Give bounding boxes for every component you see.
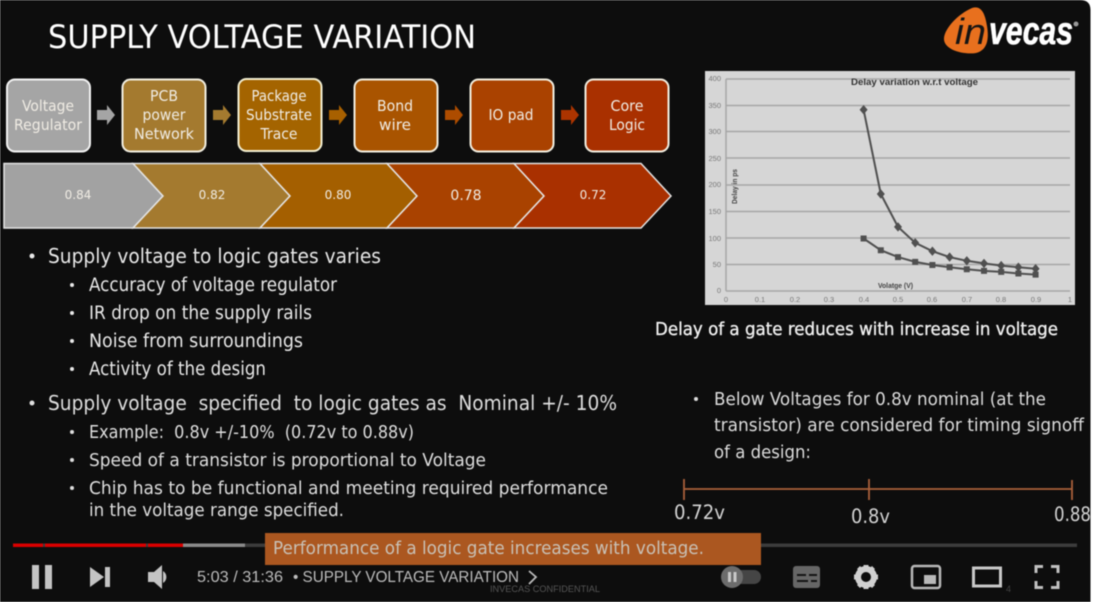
main bullet list: nominal range: Speed of a transistor is proportional to Voltage bbox=[89, 451, 486, 471]
right bullet text: Below Voltages for 0.8v nominal (at the bbox=[714, 390, 1046, 410]
y axis labels bbox=[708, 74, 721, 295]
box: PCB power network: PCB bbox=[150, 87, 178, 105]
icon: volume bbox=[148, 565, 166, 589]
slide number: 4 bbox=[1006, 584, 1011, 594]
x axis labels: 0.6 bbox=[927, 295, 937, 304]
series: upper delay curve bbox=[860, 105, 1040, 273]
box: package substrate trace: Package bbox=[252, 87, 306, 105]
box: PCB power network: Network bbox=[134, 125, 194, 143]
y axis labels: 400 bbox=[708, 74, 721, 83]
y axis labels: 250 bbox=[708, 154, 721, 163]
icon: chapter chevron bbox=[529, 571, 536, 584]
icon: next bbox=[90, 567, 110, 587]
player controls bbox=[32, 565, 1058, 589]
chevron 0.84 bbox=[4, 164, 163, 228]
x axis labels: 0.8 bbox=[996, 295, 1006, 304]
main bullet list: nominal range: Example: 0.8v +/-10% (0.72v to 0.88v) bbox=[89, 423, 414, 443]
process flow boxes bbox=[7, 79, 668, 152]
chevron 0.80: 0.80 bbox=[325, 188, 351, 202]
icon: settings gear bbox=[854, 565, 878, 589]
chevron 0.72: 0.72 bbox=[580, 188, 606, 202]
video progress bar bbox=[13, 544, 1077, 547]
x axis labels: 1 bbox=[1068, 295, 1072, 304]
box: voltage regulator bbox=[7, 80, 90, 152]
x axis labels: 0.1 bbox=[755, 295, 765, 304]
box: core logic: Core bbox=[610, 97, 644, 115]
box: IO pad bbox=[470, 80, 554, 152]
x axis labels: 0 bbox=[724, 295, 728, 304]
box: bond wire: wire bbox=[379, 116, 411, 134]
voltage range ruler bbox=[674, 479, 1091, 528]
x axis labels: 0.7 bbox=[962, 295, 972, 304]
main bullet list: nominal range bbox=[30, 391, 617, 521]
icon: invecas logo: vecas bbox=[989, 10, 1073, 53]
box: package substrate trace: Substrate bbox=[246, 106, 312, 124]
icon: autoplay toggle bbox=[721, 566, 761, 588]
y axis labels: 50 bbox=[713, 260, 721, 269]
x axis labels: 0.2 bbox=[790, 295, 800, 304]
voltage range ruler: 0.88 bbox=[1054, 503, 1091, 526]
voltage range ruler: 0.72v bbox=[674, 501, 725, 524]
chevron 0.80 bbox=[260, 164, 417, 228]
caption overlay bbox=[265, 533, 761, 565]
box: core logic: Logic bbox=[609, 116, 645, 134]
chevron 0.82: 0.82 bbox=[199, 188, 225, 202]
title: SUPPLY VOLTAGE VARIATION bbox=[48, 18, 476, 56]
box: PCB power network bbox=[122, 80, 206, 152]
x axis labels: 0.4 bbox=[859, 295, 869, 304]
y axis labels: 200 bbox=[708, 180, 721, 189]
y axis labels: 150 bbox=[708, 207, 721, 216]
box: IO pad: IO pad bbox=[488, 106, 534, 124]
time and chapter text: 5:03 / 31:36 bbox=[197, 569, 283, 586]
y axis labels: 0 bbox=[717, 286, 721, 295]
axis titles: Volatge (V) bbox=[878, 283, 913, 290]
y axis title: Delay in ps bbox=[732, 169, 739, 204]
chevron 0.82 bbox=[133, 164, 290, 228]
main bullet list: voltage varies bbox=[30, 244, 381, 380]
x axis labels: 0.3 bbox=[824, 295, 834, 304]
right bullet text: of a design: bbox=[714, 443, 811, 463]
right bullet text bbox=[694, 390, 1085, 463]
voltage range ruler: 0.8v bbox=[851, 505, 890, 528]
x axis labels bbox=[724, 295, 1072, 304]
icon: miniplayer bbox=[912, 566, 940, 588]
box: core logic bbox=[586, 80, 668, 152]
y axis labels: 350 bbox=[708, 101, 721, 110]
main bullet list: voltage varies: IR drop on the supply rails bbox=[89, 303, 312, 324]
right bullet text: transistor) are considered for timing signoff bbox=[714, 416, 1085, 436]
main bullet list: nominal range: Supply voltage specified to logic gates as Nominal +/- 10% bbox=[48, 391, 617, 415]
icon: invecas logo bbox=[944, 7, 1078, 53]
chart caption: Delay of a gate reduces with increase in voltage bbox=[655, 320, 1058, 340]
flow arrows bbox=[97, 105, 579, 125]
main bullet list: voltage varies: Noise from surroundings bbox=[89, 331, 303, 352]
box: voltage regulator: Voltage bbox=[22, 97, 74, 115]
y axis labels: 100 bbox=[708, 234, 721, 243]
series: lower delay curve bbox=[861, 236, 1039, 278]
icon: theater mode bbox=[974, 568, 1000, 586]
main bullet list: nominal range: Chip has to be functional and meeting required performance bbox=[89, 479, 608, 499]
chevron 0.78 bbox=[387, 164, 544, 228]
x axis labels: 0.5 bbox=[893, 295, 903, 304]
main bullet list: voltage varies: Activity of the design bbox=[89, 359, 266, 380]
icon: subtitles bbox=[793, 566, 820, 588]
box: bond wire bbox=[354, 80, 438, 152]
box: package substrate trace: Trace bbox=[260, 125, 298, 143]
box: package substrate trace bbox=[238, 79, 322, 151]
box: bond wire: Bond bbox=[377, 97, 413, 115]
caption overlay: Performance of a logic gate increases with voltage. bbox=[273, 539, 704, 559]
y axis labels: 300 bbox=[708, 127, 721, 136]
box: PCB power network: power bbox=[142, 106, 186, 124]
slide footer: INVECAS CONFIDENTIAL bbox=[490, 584, 600, 594]
main bullet list: voltage varies: Accuracy of voltage regulator bbox=[89, 275, 337, 296]
x axis labels: 0.9 bbox=[1031, 295, 1041, 304]
chevron 0.84: 0.84 bbox=[65, 188, 91, 202]
chevron 0.78: 0.78 bbox=[450, 188, 482, 204]
box: voltage regulator: Regulator bbox=[14, 116, 83, 134]
chart: delay vs voltage bbox=[705, 71, 1075, 305]
icon: fullscreen bbox=[1036, 566, 1058, 588]
chevron 0.72 bbox=[514, 164, 671, 228]
icon: invecas logo: in bbox=[955, 11, 986, 52]
voltage chevron band bbox=[4, 164, 671, 228]
chart title: Delay variation w.r.t voltage bbox=[851, 77, 978, 88]
chapter name: • SUPPLY VOLTAGE VARIATION bbox=[293, 569, 519, 586]
main bullet list: voltage varies: Supply voltage to logic gates varies bbox=[48, 244, 381, 268]
main bullet list: nominal range: in the voltage range specified. bbox=[89, 501, 344, 521]
icon: pause bbox=[32, 565, 52, 589]
